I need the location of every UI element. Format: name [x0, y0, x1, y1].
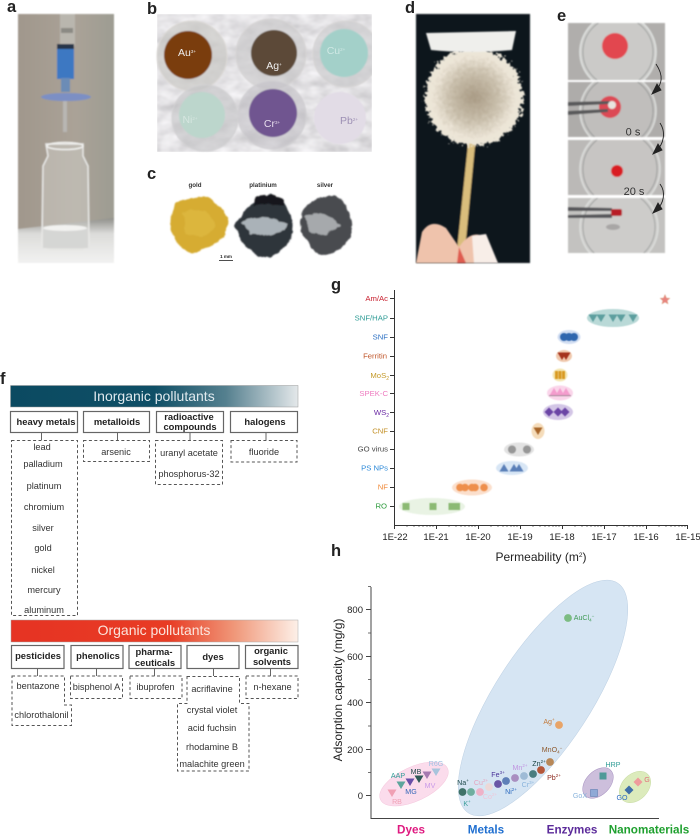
list: heavy metals: silver — [32, 523, 54, 533]
photo: gold, platinum and silver foams: gold — [188, 182, 202, 189]
group: enzymes: GoX — [573, 792, 587, 800]
category: radioactive compounds — [156, 411, 224, 440]
list: heavy metals: palladium — [23, 459, 63, 469]
category: organic solvents — [246, 645, 298, 676]
list: pesticides — [12, 676, 72, 726]
list: radioactive compounds: phosphorus-32 — [158, 469, 220, 479]
panel label b: b — [147, 0, 157, 18]
ion labels: Pb — [340, 115, 353, 127]
y tick labels: 800 — [347, 605, 363, 616]
photo: gold, platinum and silver foams: silver — [317, 182, 334, 189]
list: heavy metals — [12, 440, 78, 616]
group: dyes — [373, 753, 455, 815]
sequence arrows — [652, 64, 663, 213]
panel: inorganic pollutants — [10, 386, 298, 616]
category: pharmaceuticals: ceuticals — [135, 657, 175, 668]
ion labels: Ag — [266, 60, 279, 72]
category: metalloids: metalloids — [94, 416, 140, 427]
material labels: NF — [378, 482, 388, 492]
time label 0 s: 0 s — [626, 126, 641, 138]
time label 20 s: 20 s — [624, 186, 645, 198]
axes — [366, 586, 659, 818]
category: dyes — [187, 646, 239, 676]
panel label c: c — [147, 165, 156, 183]
metal labels: 2+ — [512, 787, 517, 792]
series: SNF — [558, 330, 580, 344]
list: pharmaceuticals — [130, 676, 182, 698]
series: PS NPs — [496, 461, 528, 475]
metal labels: 3+ — [500, 770, 505, 775]
x axis title: ) — [582, 550, 586, 564]
list: metalloids — [84, 440, 150, 462]
list: heavy metals: nickel — [31, 565, 55, 575]
material labels: RO — [375, 502, 387, 510]
category: halogens: halogens — [244, 416, 286, 427]
x tick labels: 1E-20 — [465, 532, 491, 543]
group: dyes: R6G — [429, 760, 443, 768]
list: organic solvents: n-hexane — [253, 682, 292, 692]
x tick labels: 1E-18 — [549, 532, 575, 543]
x tick labels: 1E-16 — [633, 532, 659, 543]
ion labels: 3+ — [191, 49, 196, 54]
metal labels: Na — [457, 779, 466, 787]
metal labels: 2+ — [492, 792, 497, 797]
list: radioactive compounds — [156, 440, 222, 484]
category: pesticides: pesticides — [15, 650, 61, 661]
material labels: SPEK-C — [359, 389, 388, 398]
metal labels: + — [466, 778, 469, 783]
category: organic solvents: solvents — [253, 656, 291, 667]
list: heavy metals: aluminum — [24, 605, 64, 615]
ion labels — [178, 45, 358, 130]
data groups — [399, 294, 670, 515]
photo: gold, platinum and silver foams: platinium — [249, 182, 277, 189]
list: heavy metals: lead — [33, 442, 51, 452]
category: phenolics: phenolics — [76, 650, 120, 661]
banner: organic pollutants — [11, 620, 298, 642]
category: pesticides — [12, 646, 64, 676]
list: dyes: acid fuchsin — [188, 723, 236, 733]
photo: foam resting on a dandelion — [416, 14, 530, 263]
list: heavy metals: gold — [34, 543, 52, 553]
metal labels: MnO — [542, 746, 557, 754]
category: pharmaceuticals — [129, 646, 181, 676]
list: dyes — [178, 676, 249, 771]
material labels: 2 — [386, 376, 389, 382]
ion labels: Cr — [264, 118, 275, 130]
ion labels: + — [279, 62, 282, 67]
ion labels: 3+ — [275, 120, 280, 125]
metal labels: 3+ — [529, 780, 535, 785]
photo: gold, platinum and silver foams: 1 mm — [220, 254, 232, 259]
series: SNF/HAP — [587, 309, 639, 327]
material labels: 2 — [386, 413, 389, 419]
category: organic solvents: organic — [254, 645, 288, 656]
x axis title: Permeability (m — [496, 550, 579, 564]
material labels: PS NPs — [361, 464, 388, 472]
metal labels: Pb — [547, 774, 556, 782]
category: radioactive compounds: compounds — [163, 421, 217, 432]
y tick labels: 400 — [347, 698, 363, 709]
ion labels: 2+ — [192, 116, 198, 121]
metal labels: K — [463, 800, 468, 808]
category: dyes: dyes — [202, 651, 224, 662]
metal labels: + — [468, 799, 471, 804]
group: enzymes: HRP — [606, 761, 621, 769]
x axis title: 2 — [579, 552, 583, 559]
panel label h: h — [331, 542, 341, 560]
axes — [390, 290, 688, 529]
x tick labels: 1E-22 — [382, 532, 408, 543]
category: metalloids — [84, 412, 150, 440]
material labels: GO virus — [358, 444, 388, 454]
metal labels — [457, 614, 595, 808]
y tick labels — [347, 605, 363, 802]
category: phenolics — [71, 646, 123, 676]
panel label e: e — [557, 7, 566, 25]
x tick labels: 1E-19 — [507, 532, 533, 543]
metal labels: Ag — [543, 718, 552, 726]
series: GO virus — [504, 442, 534, 456]
photo: six dishes with metal ion membranes — [157, 10, 382, 156]
series: Ferritin — [556, 350, 572, 362]
metal labels: 2+ — [483, 778, 488, 783]
category: halogens — [230, 412, 298, 440]
photo: gold, platinum and silver foams — [171, 182, 352, 261]
category: pharmaceuticals: pharma- — [136, 646, 172, 657]
ion labels: Ni — [182, 114, 192, 126]
list: dyes: malachite green — [179, 759, 245, 769]
material labels: CNF — [372, 426, 388, 436]
metal labels: − — [560, 746, 563, 750]
metal labels: Mn — [512, 764, 522, 772]
ion labels: Au — [178, 47, 191, 59]
series: CNF — [532, 423, 544, 439]
group: enzymes — [573, 761, 621, 804]
series: RO — [399, 498, 465, 515]
list: metalloids: arsenic — [101, 447, 131, 457]
metal labels: Cu — [474, 779, 483, 787]
banner: inorganic pollutants: Inorganic pollutants — [93, 388, 215, 404]
list: halogens: fluoride — [249, 447, 279, 457]
category: heavy metals: heavy metals — [17, 416, 75, 427]
material labels: SNF/HAP — [355, 314, 388, 322]
material labels: WS — [374, 408, 386, 417]
group: dyes: RB — [392, 798, 402, 806]
group: nanomaterials — [613, 765, 657, 809]
series: Am/Ac — [660, 294, 670, 304]
list: heavy metals: chromium — [24, 502, 65, 512]
metal labels: 2+ — [522, 763, 528, 768]
list: heavy metals: platinum — [27, 481, 62, 491]
panel label g: g — [331, 276, 341, 294]
metal labels: Zn — [532, 760, 541, 768]
series: MoS2 — [552, 368, 568, 382]
category labels — [397, 824, 690, 836]
banner: organic pollutants: Organic pollutants — [98, 622, 210, 638]
category: heavy metals — [10, 412, 78, 440]
metal labels: AuCl — [574, 614, 589, 622]
y tick labels: 200 — [347, 745, 363, 756]
y tick labels: 600 — [347, 652, 363, 663]
metal labels: + — [552, 717, 555, 722]
list: heavy metals: mercury — [27, 585, 61, 595]
panel: organic pollutants — [11, 620, 298, 771]
group: dyes: MB — [411, 768, 422, 776]
y tick labels: 0 — [358, 791, 363, 802]
list: pesticides: chlorothalonil — [14, 710, 69, 720]
ion labels: 2+ — [353, 117, 358, 122]
y axis title: Adsorption capacity (mg/g) — [331, 619, 345, 761]
metal labels: Cr — [522, 781, 529, 789]
ion labels: 2+ — [340, 47, 346, 52]
list: radioactive compounds: uranyl acetate — [160, 448, 218, 458]
group: nanomaterials: GO — [616, 794, 628, 802]
group: nanomaterials: G — [644, 776, 650, 784]
chart: permeability by material — [355, 290, 700, 564]
metal labels: Co — [483, 793, 492, 801]
series: NF — [452, 480, 492, 496]
metal labels: 2+ — [556, 773, 561, 778]
metal labels: 4 — [589, 618, 592, 622]
list: pesticides: bentazone — [17, 681, 59, 691]
group: dyes: MV — [425, 782, 436, 790]
x tick labels: 1E-15 — [675, 532, 700, 543]
category: radioactive compounds: radioactive — [164, 411, 214, 422]
photo sequence: oil droplet removal in a dish — [568, 14, 665, 266]
list: phenolics: bisphenol A — [73, 682, 121, 692]
chart: adsorption capacity — [331, 557, 690, 836]
x tick labels — [382, 532, 700, 543]
ion labels: Cu — [327, 45, 340, 57]
list: halogens — [231, 440, 297, 462]
group: dyes: AAP — [391, 772, 405, 780]
x tick labels: 1E-17 — [591, 532, 617, 543]
metal labels: 2+ — [541, 759, 546, 764]
list: dyes: rhodamine B — [186, 742, 238, 752]
banner: inorganic pollutants — [10, 386, 298, 407]
group: metals — [428, 557, 658, 836]
material labels: MoS — [370, 371, 386, 380]
list: organic solvents — [246, 676, 298, 698]
list: dyes: crystal violet — [187, 705, 238, 715]
photo: syringe filtering into a glass vial — [18, 14, 114, 263]
metal labels: − — [592, 614, 595, 618]
x tick labels: 1E-21 — [423, 532, 449, 543]
list: pharmaceuticals: ibuprofen — [136, 682, 175, 692]
metal labels: Fe — [491, 771, 500, 779]
series: WS2 — [543, 404, 573, 420]
group: dyes: MG — [405, 788, 417, 796]
material labels: Am/Ac — [365, 294, 388, 303]
material labels: SNF — [373, 332, 388, 342]
material labels: Ferritin — [363, 352, 387, 360]
metal labels: Ni — [505, 788, 512, 796]
list: phenolics — [70, 676, 122, 698]
list: dyes: acriflavine — [191, 684, 233, 694]
panel label f: f — [0, 370, 6, 388]
series: SPEK-C — [547, 386, 573, 400]
metal labels: 4 — [557, 750, 560, 754]
material labels — [355, 294, 389, 510]
